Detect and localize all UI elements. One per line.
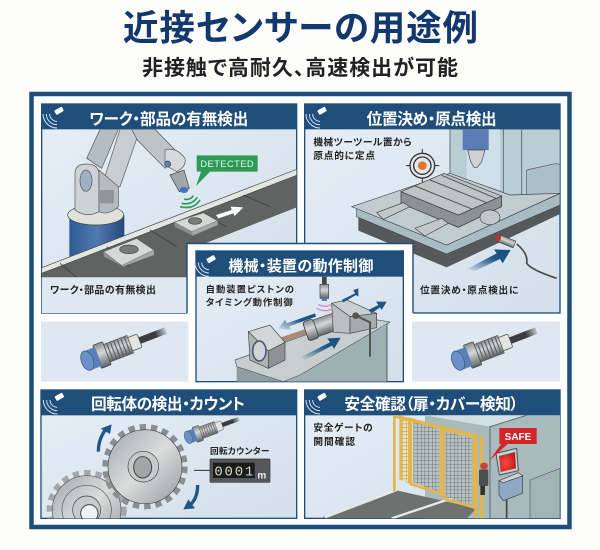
arrows: motion <box>278 288 387 360</box>
callout: detected <box>196 155 258 186</box>
header: positioning <box>305 104 560 129</box>
caption: positioning: 位置決め・原点検出に <box>420 284 518 296</box>
header: work detection <box>42 104 297 129</box>
subtitle: 非接触で高耐久、高速検出が可能 <box>142 56 458 80</box>
sensor tile: left <box>41 319 188 382</box>
caption: work detection: ワーク・部品の有無検出 <box>50 283 156 296</box>
arrow: positioning direction <box>468 249 511 272</box>
rotation counter: 回転カウンター <box>210 445 269 456</box>
vertical sensor <box>317 277 333 311</box>
front block <box>248 325 285 368</box>
header: rotating body: 回転体の検出・カウント <box>91 394 245 413</box>
note: machine tool <box>313 137 412 162</box>
workpieces <box>103 213 218 267</box>
note: safety gate: 開間確認 <box>313 436 355 448</box>
center notch <box>187 244 413 398</box>
note: machine tool: 原点的に定点 <box>313 150 375 162</box>
rotation counter: 0001 <box>214 464 253 480</box>
arrow: conveyor direction <box>216 207 243 218</box>
header: safety check: 安全確認（扉・カバー検知） <box>344 394 518 413</box>
note: piston timing: タイミング動作制御 <box>205 296 293 307</box>
warning lamp <box>496 448 518 475</box>
illustration: piston <box>235 277 390 382</box>
header: positioning: 位置決め・原点検出 <box>367 109 497 128</box>
note: safety gate: 安全ゲートの <box>313 422 373 434</box>
gate sensor <box>479 463 488 495</box>
control box <box>499 473 523 518</box>
sensor tile: right <box>412 319 560 382</box>
arrows: rotation <box>98 424 198 509</box>
gear: upper <box>106 427 184 506</box>
panel: safety check <box>305 390 560 518</box>
note: piston timing: 自動装置ピストンの <box>206 283 294 294</box>
T-slot table <box>377 173 502 236</box>
detection waves <box>180 196 200 207</box>
illustration: robot arm and conveyor <box>42 129 297 313</box>
position sensor <box>495 234 557 278</box>
rotation counter <box>194 445 270 482</box>
illustration: gears <box>50 411 242 547</box>
door panel <box>530 468 560 518</box>
callout: safe <box>489 428 537 461</box>
rotating sensor <box>184 417 240 444</box>
illustration: safety gate <box>320 415 560 518</box>
title: 近接センサーの用途例 <box>123 8 478 48</box>
panel: positioning <box>305 104 560 313</box>
callout: detected: DETECTED <box>200 159 254 169</box>
header: motion control: 機械・装置の動作制御 <box>228 257 373 275</box>
gear: lower <box>46 470 127 518</box>
note: safety gate <box>313 422 373 448</box>
outer frame <box>32 94 570 527</box>
icon: target <box>406 149 439 182</box>
header: safety check <box>305 390 560 415</box>
panel: machine motion control <box>195 251 403 382</box>
note: piston timing <box>205 283 294 307</box>
note: machine tool: 機械ツーツール置から <box>313 137 412 149</box>
illustration: machine tool <box>352 129 560 278</box>
header: motion control <box>195 251 403 277</box>
panel: rotating body <box>40 389 298 519</box>
yellow gate <box>394 416 482 518</box>
header: rotating body <box>41 390 297 415</box>
header: work detection: ワーク・部品の有無検出 <box>89 109 248 128</box>
piston cylinder <box>281 313 333 342</box>
panel: work detection <box>42 104 297 313</box>
callout: safe: SAFE <box>505 432 532 443</box>
rear block <box>332 300 377 357</box>
rotation counter: m <box>257 471 266 482</box>
